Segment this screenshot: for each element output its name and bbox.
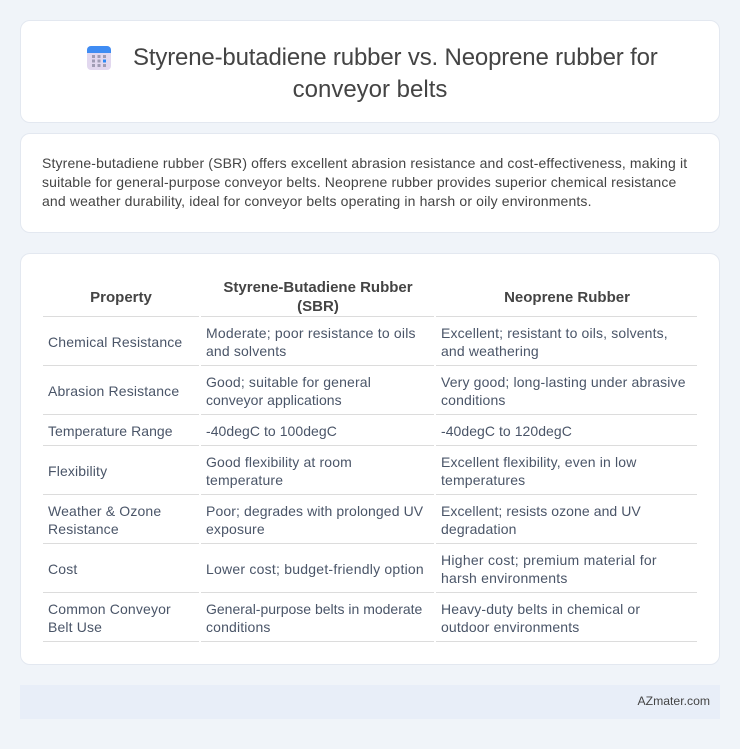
row: temperature range: -40degC to 100degC bbox=[206, 423, 337, 439]
row: weather and ozone resistance: Poor; degrades with prolonged UV bbox=[206, 503, 423, 519]
row: cost: Lower cost; budget-friendly option bbox=[206, 561, 424, 577]
table header: (SBR) bbox=[297, 298, 339, 315]
row: chemical resistance: and weathering bbox=[441, 343, 539, 359]
table header bbox=[43, 279, 697, 317]
row: weather and ozone resistance: Excellent; resists ozone and UV bbox=[441, 503, 641, 519]
row: flexibility: Excellent flexibility, even in low bbox=[441, 454, 636, 470]
row: common conveyor belt use bbox=[43, 601, 697, 642]
table header: Property bbox=[90, 289, 152, 306]
row: flexibility: temperature bbox=[206, 472, 283, 488]
summary text bbox=[42, 155, 688, 209]
row: weather and ozone resistance bbox=[43, 503, 697, 544]
summary text: suitable for general-purpose conveyor belts. Neoprene rubber provides superior chemical resistance bbox=[42, 174, 676, 190]
title: conveyor belts bbox=[293, 76, 447, 103]
icon: calendar bbox=[87, 46, 111, 70]
row: temperature range bbox=[43, 423, 697, 446]
summary card bbox=[20, 133, 720, 233]
row: abrasion resistance: conveyor applications bbox=[206, 392, 342, 408]
row: temperature range: Temperature Range bbox=[48, 423, 173, 439]
footer credit: AZmater.com bbox=[638, 694, 710, 708]
row: abrasion resistance: conditions bbox=[441, 392, 506, 408]
row: cost bbox=[43, 552, 697, 593]
row: abrasion resistance bbox=[43, 374, 697, 415]
row: common conveyor belt use: conditions bbox=[206, 619, 271, 635]
row: cost: Higher cost; premium material for bbox=[441, 552, 657, 568]
row: common conveyor belt use: General-purpose belts in moderate bbox=[206, 601, 422, 617]
row: cost: Cost bbox=[48, 561, 77, 577]
summary text: Styrene-butadiene rubber (SBR) offers excellent abrasion resistance and cost-effectiveness, making it bbox=[42, 155, 687, 171]
title: Styrene-butadiene rubber vs. Neoprene rubber for bbox=[133, 44, 658, 71]
row: weather and ozone resistance: exposure bbox=[206, 521, 265, 537]
table header: Neoprene Rubber bbox=[504, 289, 630, 306]
row: chemical resistance: Chemical Resistance bbox=[48, 334, 182, 350]
footer bar bbox=[20, 685, 720, 719]
row: common conveyor belt use: Heavy-duty belts in chemical or bbox=[441, 601, 640, 617]
row: weather and ozone resistance: degradation bbox=[441, 521, 517, 537]
title bbox=[133, 44, 658, 103]
row: cost: harsh environments bbox=[441, 570, 568, 586]
title card bbox=[20, 20, 720, 123]
row: flexibility: temperatures bbox=[441, 472, 525, 488]
row: common conveyor belt use: Common Conveyor bbox=[48, 601, 171, 617]
row: chemical resistance: Excellent; resistant to oils, solvents, bbox=[441, 325, 668, 341]
row: abrasion resistance: Good; suitable for general bbox=[206, 374, 371, 390]
row: weather and ozone resistance: Resistance bbox=[48, 521, 119, 537]
row: abrasion resistance: Very good; long-lasting under abrasive bbox=[441, 374, 686, 390]
row: chemical resistance bbox=[43, 325, 697, 366]
row: flexibility: Good flexibility at room bbox=[206, 454, 352, 470]
row: chemical resistance: Moderate; poor resistance to oils bbox=[206, 325, 416, 341]
row: common conveyor belt use: outdoor environments bbox=[441, 619, 579, 635]
comparison table panel bbox=[20, 253, 720, 665]
row: weather and ozone resistance: Weather & Ozone bbox=[48, 503, 161, 519]
summary text: and weather durability, ideal for conveyor belts operating in harsh or oily environments. bbox=[42, 193, 592, 209]
row: chemical resistance: and solvents bbox=[206, 343, 286, 359]
row: abrasion resistance: Abrasion Resistance bbox=[48, 383, 179, 399]
table header: Styrene-Butadiene Rubber bbox=[223, 279, 413, 296]
row: flexibility bbox=[43, 454, 697, 495]
row: common conveyor belt use: Belt Use bbox=[48, 619, 102, 635]
row: flexibility: Flexibility bbox=[48, 463, 107, 479]
row: temperature range: -40degC to 120degC bbox=[441, 423, 572, 439]
